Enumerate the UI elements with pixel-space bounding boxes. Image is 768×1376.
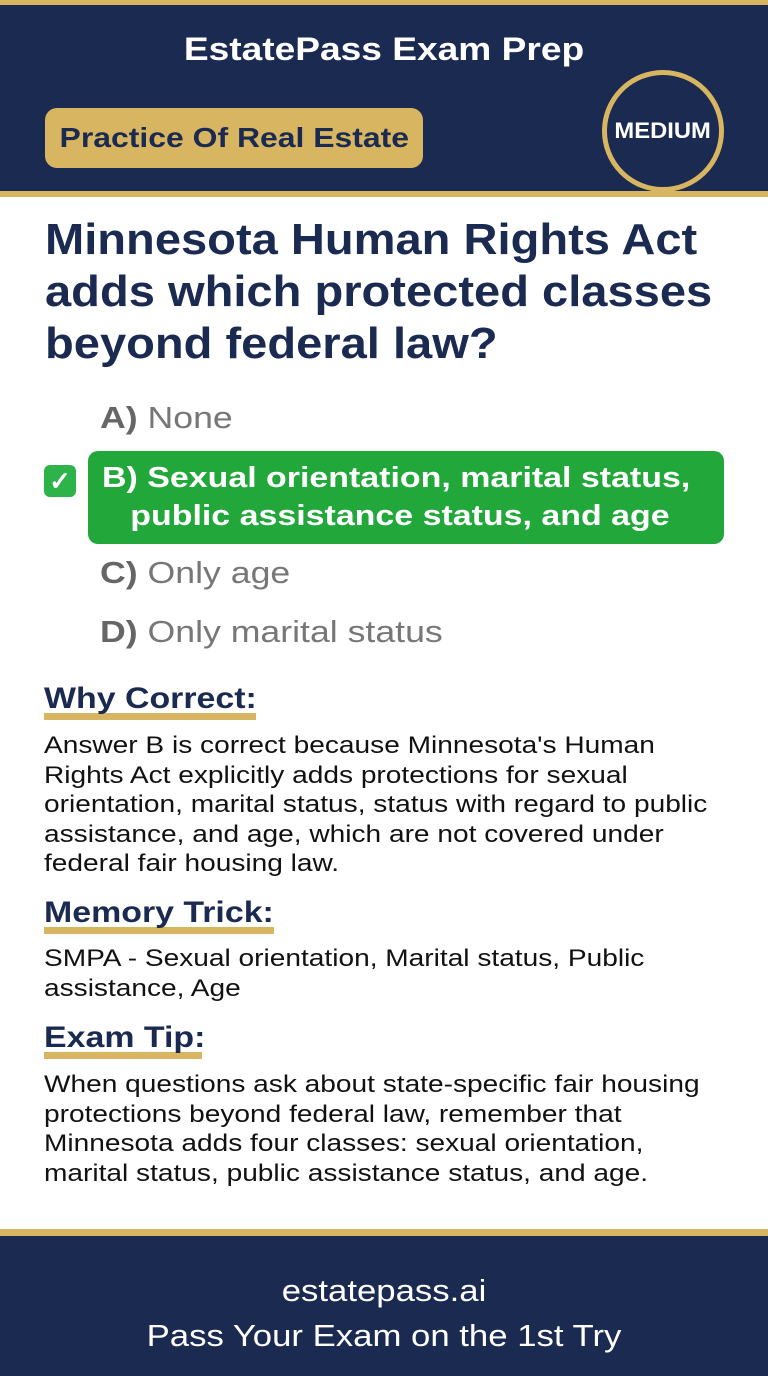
footer text [147, 1273, 622, 1353]
option D: D) Only marital status [100, 614, 443, 649]
section: exam tip [44, 1021, 700, 1186]
text: Rights Act explicitly adds protections for sexual [44, 762, 628, 788]
option B box: B) Sexual orientation, marital status, [102, 462, 690, 494]
question title: Minnesota Human Rights Act [45, 215, 697, 264]
icon: check: ✓ [49, 466, 71, 496]
text: Minnesota adds four classes: sexual orientation, [44, 1130, 643, 1157]
footer [0, 1229, 768, 1376]
header title: EstatePass Exam Prep [184, 31, 584, 67]
question title: adds which protected classes [45, 267, 712, 316]
section: why correct [44, 682, 707, 877]
option B box [88, 451, 724, 544]
correct answer [44, 451, 724, 544]
option B box: public assistance status, and age [130, 500, 670, 532]
heading: Why Correct: [44, 682, 257, 715]
footer text: Pass Your Exam on the 1st Try [147, 1318, 621, 1353]
text [44, 1071, 700, 1186]
text: marital status, public assistance status, and age. [44, 1160, 648, 1186]
text: assistance, Age [44, 974, 241, 1002]
text: Answer B is correct because Minnesota's Human [44, 732, 655, 759]
heading: Exam Tip: [44, 1021, 205, 1054]
question title [45, 215, 712, 368]
header band [0, 0, 768, 197]
text: SMPA - Sexual orientation, Marital status, Public [44, 945, 644, 972]
option C: C) Only age [100, 555, 290, 590]
category pill [45, 108, 423, 168]
heading: Memory Trick: [44, 896, 274, 929]
category pill: Practice Of Real Estate [59, 122, 409, 153]
option A: A) None [100, 400, 233, 435]
text: When questions ask about state-specific fair housing [44, 1071, 700, 1098]
text: orientation, marital status, status with regard to public [44, 791, 707, 818]
footer text: estatepass.ai [282, 1273, 486, 1308]
section: memory trick [44, 896, 644, 1002]
question title: beyond federal law? [45, 319, 498, 368]
text: assistance, and age, which are not covered under [44, 820, 664, 848]
text: protections beyond federal law, remember that [44, 1100, 622, 1128]
text [44, 732, 707, 877]
difficulty badge: MEDIUM [615, 118, 711, 143]
text [44, 945, 644, 1002]
text: federal fair housing law. [44, 850, 339, 877]
icon: check [44, 465, 76, 497]
difficulty badge [602, 70, 724, 192]
